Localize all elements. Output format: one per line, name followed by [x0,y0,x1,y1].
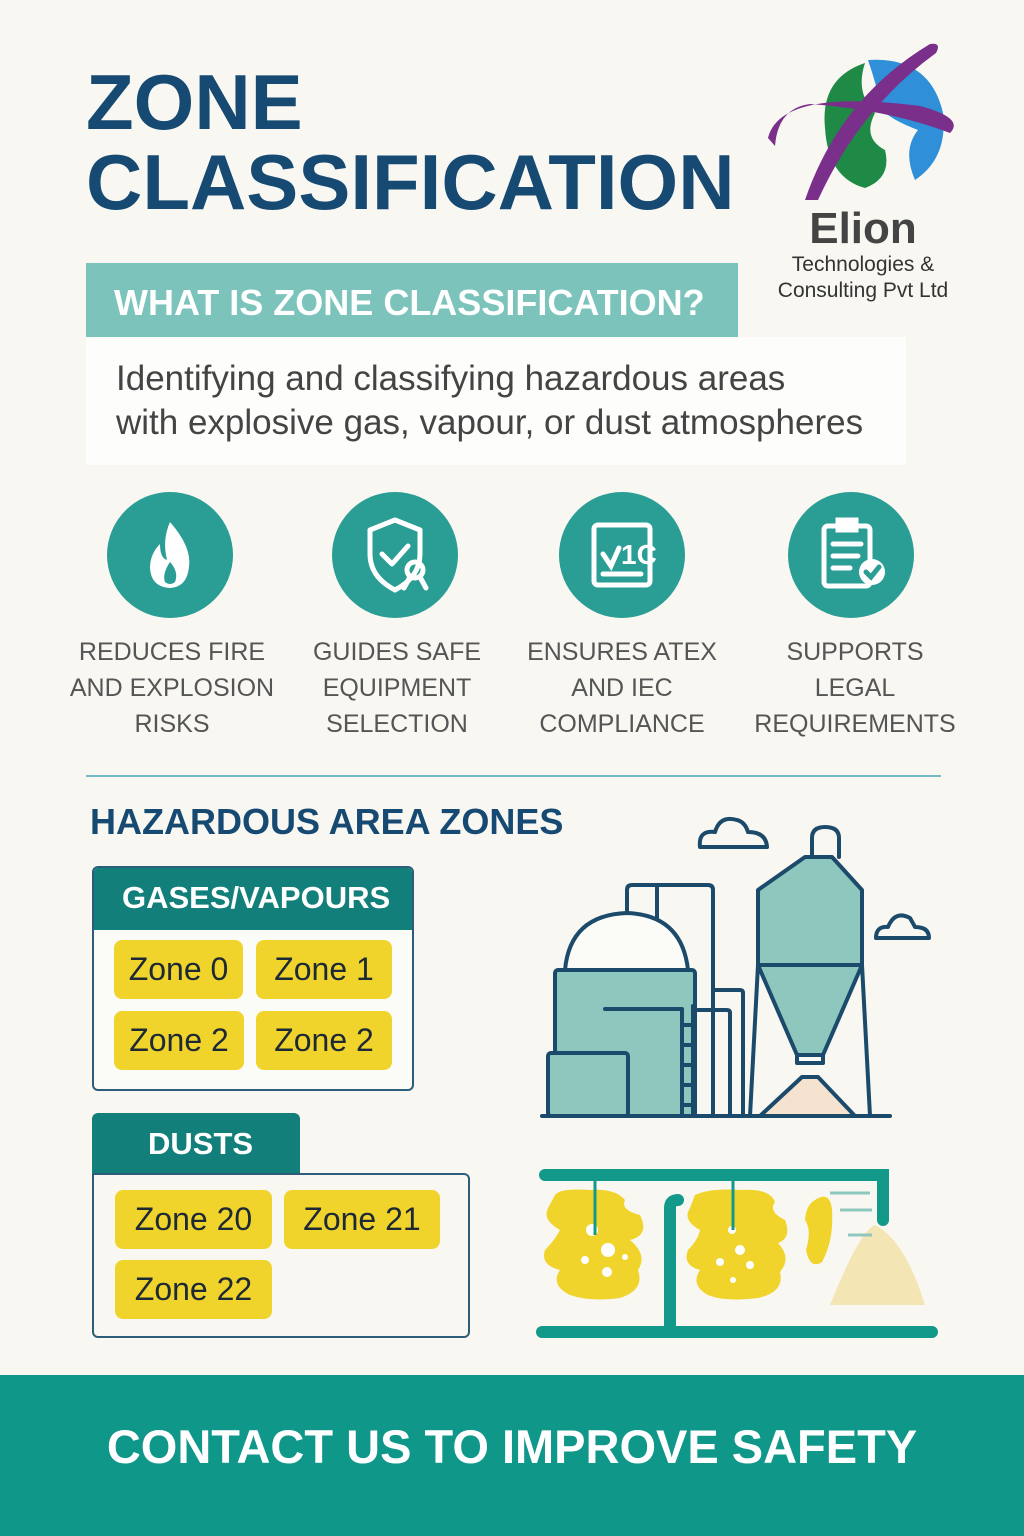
caption: atex: AND IEC [571,674,673,702]
icon: compliance [559,492,685,618]
title [86,58,735,226]
caption: legal: SUPPORTS [786,638,924,666]
caption: equipment: GUIDES SAFE [313,638,481,666]
panel: dusts: Zone 20 [135,1201,252,1237]
caption: atex [527,638,717,738]
zone pills gases [114,940,392,1070]
zone pills gases: Zone 0 [129,951,228,987]
icon: clipboard [788,492,914,618]
caption: equipment [313,638,481,738]
caption: fire: RISKS [134,710,210,738]
logo [768,44,954,302]
logo: Consulting Pvt Ltd [778,279,948,302]
definition text: Identifying and classifying hazardous areas [116,359,785,398]
zone pills gases: Zone 1 [274,951,374,987]
title: ZONE [86,58,303,146]
panel: dusts [92,1113,470,1338]
heading: hazardous area zones: HAZARDOUS AREA ZONES [90,801,563,842]
caption: equipment: SELECTION [326,710,468,738]
logo: Technologies & [792,253,934,276]
caption: atex: COMPLIANCE [539,710,705,738]
panel: dusts: DUSTS [148,1126,253,1161]
panel: dusts: Zone 21 [303,1201,421,1237]
icon: shield [332,492,458,618]
definition text: with explosive gas, vapour, or dust atmospheres [116,403,863,442]
caption: atex: ENSURES ATEX [527,638,717,666]
definition text [86,337,906,465]
heading: what is zone classification [86,263,738,337]
caption: legal: LEGAL [815,674,895,702]
caption: fire: REDUCES FIRE [79,638,265,666]
title: CLASSIFICATION [86,138,735,226]
footer: call to action: CONTACT US TO IMPROVE SAFETY [107,1420,917,1473]
illustration: industrial plant [536,816,938,1338]
panel: gases: GASES/VAPOURS [122,880,390,915]
panel: gases [92,866,414,1091]
caption: legal: REQUIREMENTS [754,710,956,738]
logo: Elion [809,204,917,253]
zone pills gases: Zone 2 [129,1022,229,1058]
panel: dusts: Zone 22 [135,1271,252,1307]
heading: what is zone classification: WHAT IS ZONE CLASSIFICATION? [114,282,705,323]
icon: compliance: 1C [621,539,657,570]
icon: fire [107,492,233,618]
footer: call to action [0,1375,1024,1536]
zone pills gases: Zone 2 [274,1022,374,1058]
caption: legal [754,638,956,738]
caption: equipment: EQUIPMENT [323,674,471,702]
caption: fire: AND EXPLOSION [70,674,274,702]
caption: fire [70,638,274,738]
